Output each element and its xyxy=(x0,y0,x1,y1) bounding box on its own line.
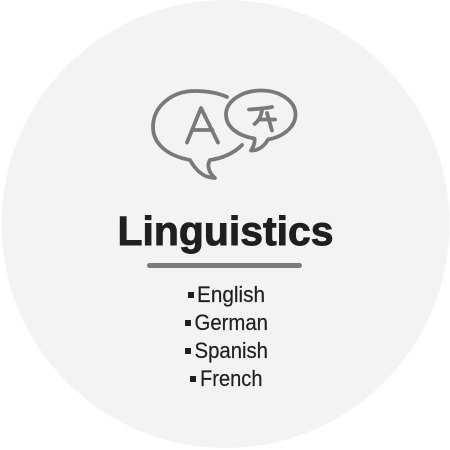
list item: French: French xyxy=(200,366,262,391)
icon: letter A xyxy=(187,108,218,142)
list item: Spanish: Spanish xyxy=(194,338,268,363)
icon: foreign character xyxy=(249,107,275,130)
list item: English: English xyxy=(197,282,265,307)
list of languages xyxy=(185,282,268,391)
title: Linguistics xyxy=(118,208,334,254)
icon: speech bubbles with letters xyxy=(153,90,296,178)
icon: large speech bubble xyxy=(153,91,242,178)
divider bar xyxy=(147,263,302,268)
list item: German: German xyxy=(194,310,268,335)
icon: small speech bubble xyxy=(226,90,296,151)
